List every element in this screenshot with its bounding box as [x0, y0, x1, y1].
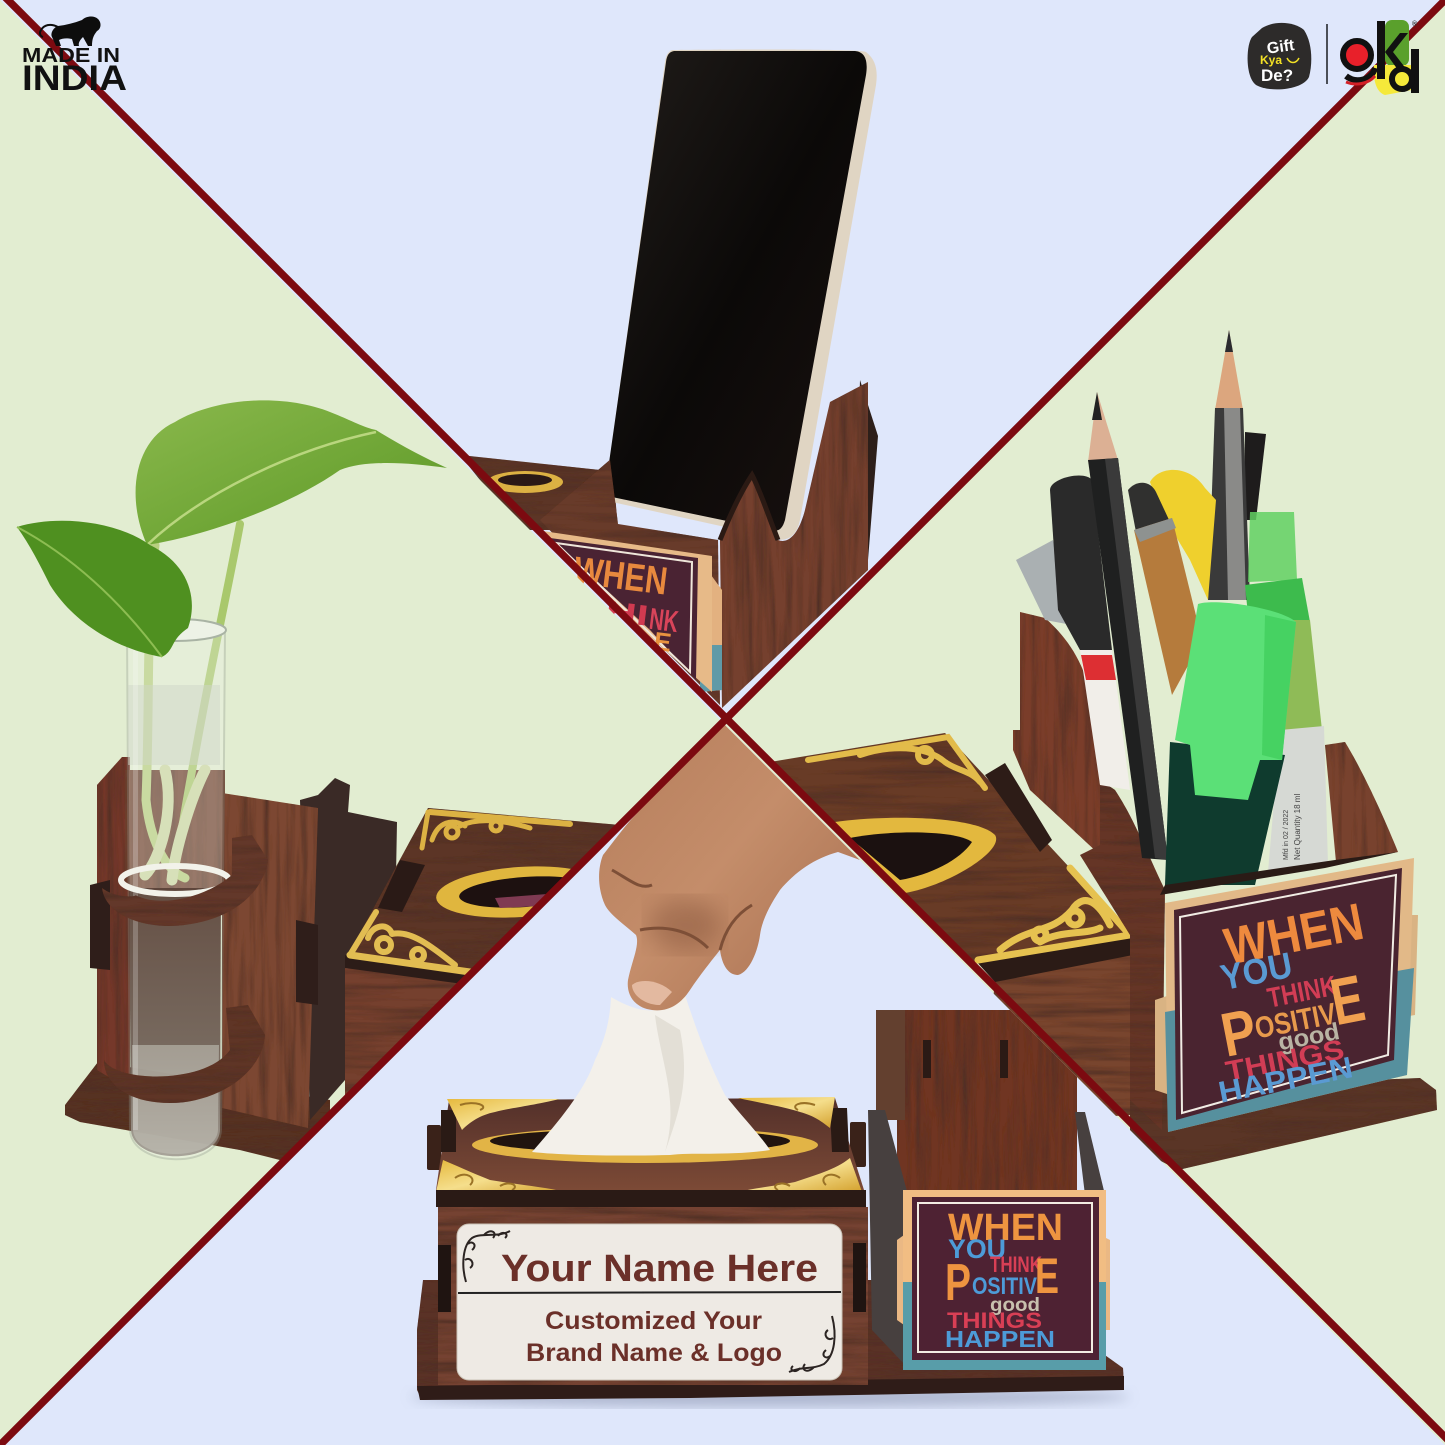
panel: bottom quadrant, tissue box — [410, 700, 1130, 1407]
panel: left quadrant, plant test tube holder — [17, 400, 620, 1160]
poster: WHEN — [572, 549, 670, 603]
tissue box lid — [770, 733, 1132, 962]
leaf: large top — [136, 400, 447, 545]
highlighter — [1165, 602, 1296, 885]
poster — [1165, 858, 1414, 1132]
silver foil — [1016, 540, 1072, 625]
soft shadow — [410, 1387, 1130, 1407]
plant stems — [145, 524, 240, 880]
logo: gkd: ® — [1412, 20, 1418, 28]
poster tab ear — [706, 576, 722, 692]
black marker — [1050, 475, 1112, 650]
poster — [903, 1190, 1106, 1370]
tab on lid — [378, 860, 425, 912]
gold oval opening — [436, 866, 571, 918]
holder side wings — [868, 1110, 1105, 1365]
gold corner top — [422, 812, 570, 848]
tissue box lid — [427, 1098, 866, 1190]
back wood panel left — [97, 757, 130, 1090]
poster: NK — [647, 603, 680, 639]
name plate — [457, 1224, 842, 1380]
poster lettering: P — [945, 1254, 971, 1312]
logo: made in india: INDIA — [22, 59, 127, 98]
base plate — [417, 1280, 1124, 1400]
grey pencil — [1208, 330, 1250, 600]
holder left side wood — [1080, 780, 1165, 1130]
gold corners — [436, 1097, 862, 1192]
stand rear dark strip — [860, 380, 878, 560]
side slots — [438, 1243, 866, 1312]
yellow pen clip — [1150, 470, 1216, 600]
base plate — [65, 1062, 330, 1160]
poster ears — [897, 1235, 1110, 1330]
hand — [599, 700, 860, 1010]
back wood panel right — [222, 793, 318, 1128]
upper brown ring — [102, 835, 268, 926]
stand left panel — [540, 460, 720, 705]
panel: right quadrant, pen holder — [770, 330, 1437, 1170]
bottle label: Net Quantity 18 ml — [1293, 794, 1302, 860]
green bottle — [1245, 512, 1322, 740]
lid tab — [985, 763, 1052, 852]
lid front edge — [345, 955, 470, 985]
poster lettering: HAPPEN — [1216, 1051, 1356, 1110]
poster lettering: YOU — [1217, 944, 1296, 998]
back panel with curve — [1013, 612, 1105, 855]
tissue — [532, 995, 770, 1156]
plate sub text: Brand Name & Logo — [526, 1339, 782, 1367]
base plate — [1130, 1078, 1437, 1170]
tissue box front wood — [994, 956, 1130, 1116]
gold corner front — [350, 912, 470, 972]
poster lettering: E — [1325, 960, 1370, 1039]
gold corner top — [808, 737, 985, 788]
poster: E — [652, 628, 673, 658]
logo: made in india — [22, 16, 127, 98]
poster lettering: WHEN — [948, 1207, 1063, 1249]
poster lettering: THINGS — [947, 1308, 1042, 1333]
bottle label: Mfd in 02 / 2022 — [1283, 810, 1290, 860]
box front wood — [438, 1207, 868, 1385]
poster lettering — [1186, 893, 1393, 1110]
plate heading: Your Name Here — [501, 1248, 818, 1290]
holder back panel — [876, 1010, 1077, 1190]
stand right panel — [720, 382, 868, 708]
stand curved inner edge — [720, 475, 778, 540]
icon: lion — [40, 16, 101, 46]
logo: gkd — [1343, 20, 1419, 95]
plate scroll ornament bottom right — [789, 1316, 835, 1372]
gold corner front — [978, 868, 1130, 960]
back right holder wing — [1325, 742, 1398, 862]
stand left ear — [583, 460, 618, 519]
black pencil behind — [1244, 432, 1266, 520]
poster lettering: YOU — [948, 1234, 1006, 1264]
back wood behind tube — [125, 770, 225, 890]
dark side panel with notches — [300, 778, 397, 1120]
leaf: lower left — [17, 521, 192, 657]
wooden pen — [1128, 483, 1202, 695]
white marker body — [1080, 650, 1130, 790]
test tube — [126, 619, 226, 1159]
panel: top quadrant, phone stand — [460, 50, 878, 708]
poster lettering: THINK — [1265, 970, 1339, 1014]
plate scroll ornament top left — [463, 1231, 510, 1282]
gold opening — [472, 1127, 818, 1163]
poster lettering: OSITIV — [1252, 997, 1339, 1045]
poster lettering — [945, 1207, 1063, 1352]
lid front edge — [436, 1190, 866, 1207]
logo: made in india: MADE IN — [22, 45, 120, 67]
lower brown ring — [104, 1005, 265, 1103]
black pencil — [1088, 392, 1168, 860]
white collar — [121, 866, 229, 894]
side tabs — [90, 880, 318, 1005]
poster lettering: THINGS — [1223, 1034, 1347, 1087]
plate sub text — [526, 1307, 782, 1367]
lid tabs — [441, 1108, 849, 1152]
poster lettering: E — [1035, 1248, 1059, 1304]
poster: HI — [603, 596, 650, 633]
plate sub text: Customized Your — [545, 1307, 762, 1335]
poster lettering: good — [1276, 1018, 1342, 1056]
logo: gift kya de: Gift — [1266, 37, 1296, 58]
logo: gift kya de — [1248, 23, 1311, 89]
bottle label — [1268, 726, 1328, 872]
phone — [605, 50, 877, 540]
poster lettering: THINK — [990, 1252, 1042, 1277]
poster lettering: OSITIV — [972, 1273, 1037, 1300]
poster lettering: P — [1216, 996, 1262, 1071]
poster lettering: HAPPEN — [945, 1326, 1055, 1352]
logo: gift kya de: De? — [1261, 66, 1293, 85]
logo divider — [1326, 24, 1328, 84]
poster lettering: WHEN — [1220, 893, 1368, 977]
poster — [536, 530, 712, 692]
poster lettering: good — [990, 1295, 1040, 1316]
lid front edge — [978, 938, 1130, 982]
tissue box lid — [355, 808, 616, 969]
holder front ledge — [1160, 852, 1398, 895]
gold oval opening — [835, 818, 996, 893]
logo: gift kya de: Kya — [1260, 53, 1282, 67]
tissue box front wood — [345, 968, 457, 1095]
poster ears — [1155, 915, 1418, 1095]
tissue box behind — [460, 455, 600, 530]
